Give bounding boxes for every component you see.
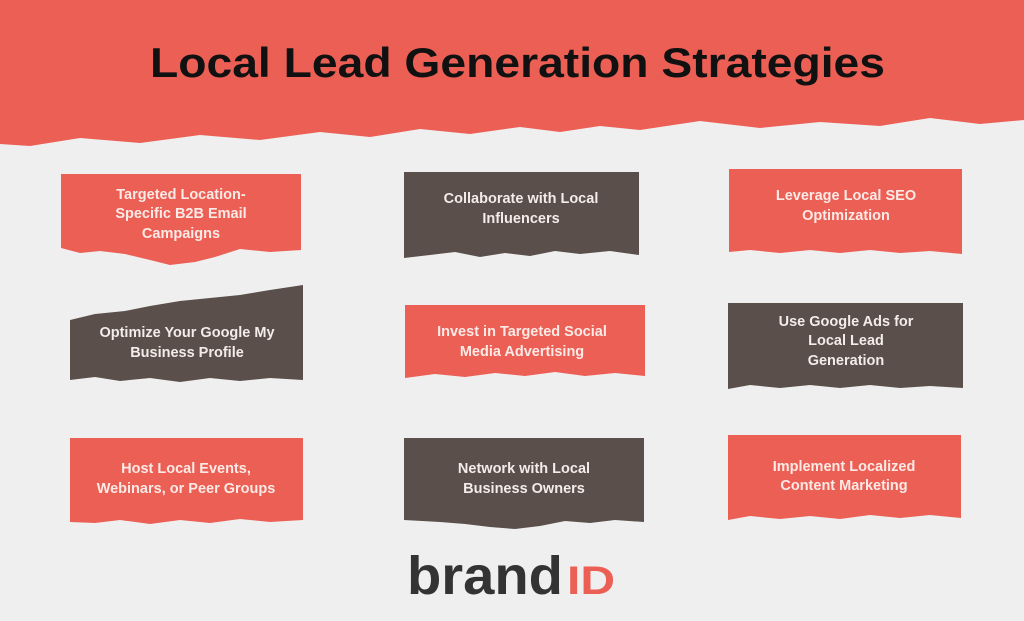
card 2	[404, 172, 639, 258]
card 2: Influencers	[482, 211, 560, 227]
card 9: Content Marketing	[780, 478, 908, 494]
card 9	[728, 435, 961, 520]
card 2: Collaborate with Local	[444, 191, 598, 207]
logo: ID	[567, 559, 615, 603]
card 4	[70, 285, 303, 382]
card 1: Campaigns	[142, 226, 220, 242]
card 8: Business Owners	[463, 481, 585, 497]
card 5	[405, 305, 645, 378]
card 3: Optimization	[802, 208, 890, 224]
card 3	[729, 169, 962, 254]
header banner	[0, 0, 1024, 146]
card 8: Network with Local	[458, 461, 590, 477]
card 7: Webinars, or Peer Groups	[97, 481, 275, 497]
card 7: Host Local Events,	[121, 461, 251, 477]
card 9: Implement Localized	[773, 459, 915, 475]
card 5: Media Advertising	[460, 344, 584, 360]
card 6: Generation	[808, 353, 884, 369]
title: Local Lead Generation Strategies	[150, 39, 885, 86]
card 1	[61, 174, 301, 265]
card 5: Invest in Targeted Social	[437, 324, 607, 340]
card 6	[728, 303, 963, 389]
card 7	[70, 438, 303, 524]
card 3: Leverage Local SEO	[776, 188, 916, 204]
card 1: Targeted Location-	[116, 187, 246, 203]
card 8	[404, 438, 644, 529]
card 1: Specific B2B Email	[115, 206, 247, 222]
card 6: Use Google Ads for	[779, 314, 914, 330]
card 6: Local Lead	[808, 333, 884, 349]
logo: brand	[407, 546, 563, 606]
card 4: Business Profile	[130, 345, 244, 361]
card 4: Optimize Your Google My	[99, 325, 275, 341]
